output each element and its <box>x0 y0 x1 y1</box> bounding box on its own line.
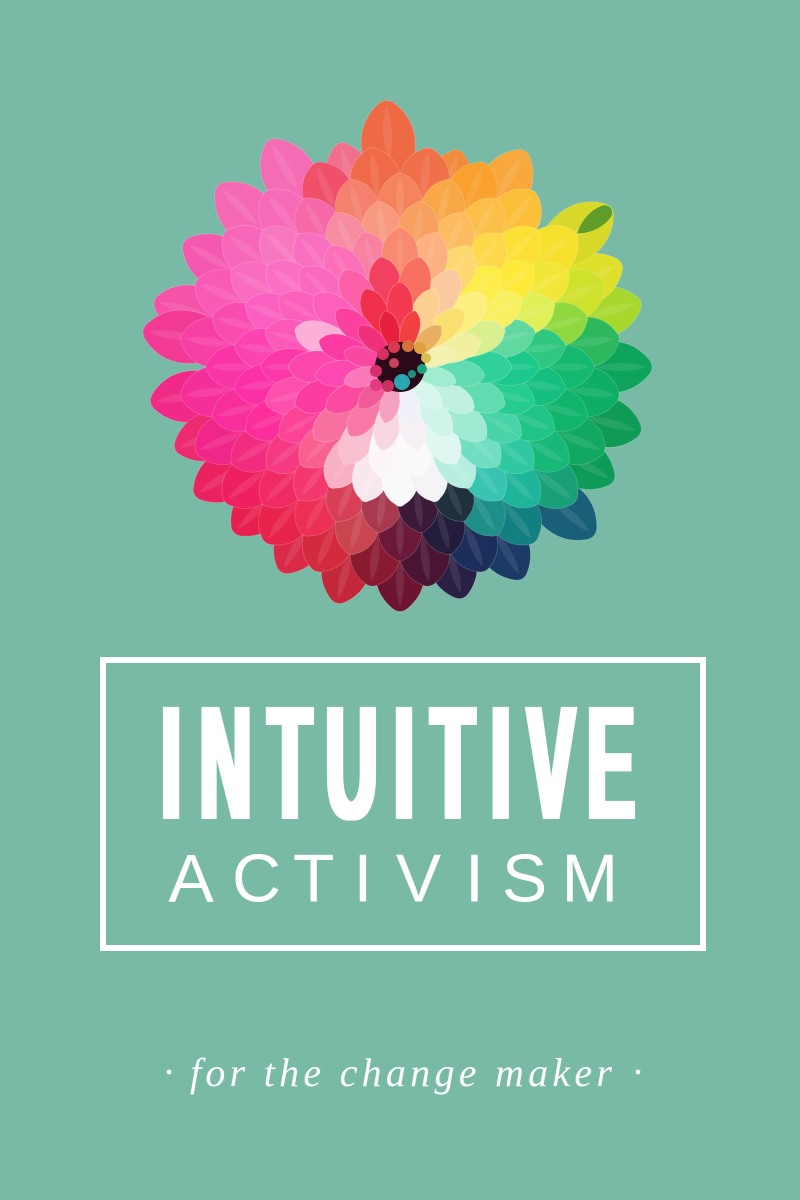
flower centre <box>370 340 431 392</box>
petal ring: third <box>206 173 594 561</box>
petal ring: innermost <box>342 309 458 425</box>
flower: rainbow chrysanthemum <box>139 99 652 612</box>
subtitle: ACTIVISM: ACTIVISM <box>168 840 618 916</box>
petal ring: outermost <box>139 99 652 612</box>
petal ring: fourth <box>232 199 568 535</box>
petal ring: sixth <box>288 254 512 480</box>
tagline <box>167 1050 640 1095</box>
petal ring: second <box>178 145 622 589</box>
title: INTUITIVE: INTUITIVE <box>161 671 635 854</box>
petal tip: green-tipped yellow petal <box>572 201 616 240</box>
title frame <box>103 660 703 948</box>
tagline dot left <box>167 1070 171 1074</box>
tagline text: for the change maker <box>190 1050 612 1095</box>
petal ring: fifth <box>260 228 540 507</box>
tagline dot right <box>636 1070 640 1074</box>
petal ring: seventh <box>314 282 486 453</box>
